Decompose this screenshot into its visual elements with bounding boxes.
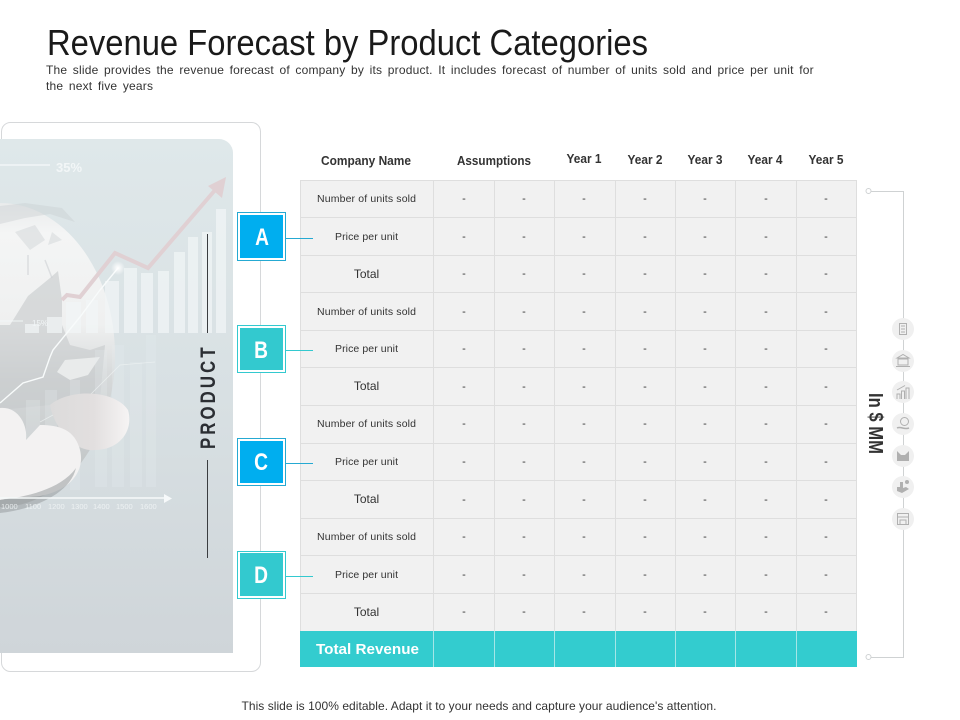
table values: - [462,456,466,468]
table values: - [764,494,768,506]
table values: - [643,343,647,355]
row labels: Number of units sold [317,418,416,430]
image: globe, hand and growth chart: 1300 [71,502,88,511]
table values: - [522,306,526,318]
table header: Year 4 [748,152,783,167]
table values: - [462,569,466,581]
icon: hand with coin [892,413,914,435]
table grid [300,180,857,631]
icon: document [892,318,914,340]
table values: - [462,606,466,618]
table values: - [824,456,828,468]
table values: - [643,494,647,506]
marker C: C [254,448,268,476]
table values: - [582,306,586,318]
table header: Year 5 [808,152,844,167]
image: globe, hand and growth chart: 1000 [1,502,18,511]
row labels: Total [354,605,379,619]
table header: Year 3 [688,152,722,167]
vertical label: PRODUCT: PRODUCT [197,347,221,449]
table values: - [703,381,707,393]
table header: Company Name [321,153,411,168]
table values: - [764,569,768,581]
table values: - [462,381,466,393]
table values: - [824,606,828,618]
unit label: In $ MM [864,393,886,454]
table values: - [582,494,586,506]
subtitle text block: The slide provides the revenue forecast of company by its product. It includes forecast of number of units sold and price per unit for [46,63,814,77]
icon column [892,318,914,530]
table values: - [522,381,526,393]
table values: - [764,231,768,243]
table values: - [522,494,526,506]
image: globe, hand and growth chart: 1200 [48,502,65,511]
table values: - [582,343,586,355]
table values: - [582,456,586,468]
image: globe, hand and growth chart: 1500 [116,502,133,511]
table values: - [703,456,707,468]
table values: - [703,531,707,543]
faint lower bars [26,335,156,490]
table values: - [824,531,828,543]
total revenue row: Total Revenue [316,641,419,658]
table values: - [462,231,466,243]
marker B: B [254,336,268,364]
table header: Year 2 [628,152,662,167]
icon: calendar [892,508,914,530]
footer text: This slide is 100% editable. Adapt it to your needs and capture your audience's attention. [242,699,716,713]
table values: - [522,418,526,430]
marker D: D [254,561,268,589]
table values: - [643,306,647,318]
table header: Year 1 [566,151,602,166]
row labels: Price per unit [335,569,398,581]
bracket: unit annotation [866,188,904,660]
table values: - [824,381,828,393]
table values: - [824,268,828,280]
table values: - [824,306,828,318]
subtitle text block [46,63,814,93]
table body background [300,180,857,631]
table values: - [764,531,768,543]
title: Revenue Forecast by Product Categories [47,22,648,63]
table values: - [643,418,647,430]
table values: - [462,418,466,430]
image: globe, hand and growth chart: 35% [56,160,82,175]
table values: - [703,193,707,205]
table header: Assumptions [457,153,531,168]
table values: - [643,268,647,280]
table values: - [764,306,768,318]
table values: - [462,343,466,355]
table values: - [703,418,707,430]
table values: - [703,569,707,581]
row labels: Price per unit [335,343,398,355]
table values: - [824,231,828,243]
row labels: Number of units sold [317,193,416,205]
connector lines from markers to table rows [286,238,313,576]
table values: - [582,193,586,205]
panel: product image card [0,122,260,672]
table values: - [824,418,828,430]
icon: team [892,445,914,467]
table values: - [522,268,526,280]
table values: - [643,381,647,393]
table values: - [703,231,707,243]
table values: - [824,569,828,581]
icon: hand with chart [892,476,914,498]
table values: - [824,343,828,355]
table values: - [824,494,828,506]
table values: - [703,494,707,506]
table values: - [462,494,466,506]
table values: - [582,569,586,581]
table values: - [764,193,768,205]
table values: - [643,531,647,543]
table values: - [582,606,586,618]
image: globe, hand and growth chart: 1600 [140,502,157,511]
image: globe, hand and growth chart [0,139,233,653]
table values: - [643,456,647,468]
row labels: Price per unit [335,456,398,468]
table values: - [643,231,647,243]
hand [50,394,129,450]
image: globe, hand and growth chart: 1400 [93,502,110,511]
marker C [238,438,286,486]
table values: - [462,193,466,205]
table: revenue forecast [300,151,857,667]
table values: - [522,531,526,543]
icon: bank [892,350,914,372]
table header [321,151,844,168]
marker A: A [255,223,269,251]
marker B [238,326,286,372]
marker D [238,552,286,598]
table values: - [582,268,586,280]
table values: - [462,306,466,318]
table values: - [764,606,768,618]
table values: - [522,606,526,618]
table values: - [522,456,526,468]
image: globe, hand and growth chart: 15% [32,319,48,328]
row labels: Price per unit [335,231,398,243]
table values: - [703,606,707,618]
row labels: Total [354,379,379,393]
table values: - [522,343,526,355]
table values: - [643,569,647,581]
table values: - [764,343,768,355]
icon: growth bars [892,381,914,403]
row labels: Number of units sold [317,306,416,318]
table values: - [462,268,466,280]
table values: - [824,193,828,205]
table values [462,193,828,618]
table values: - [703,306,707,318]
image: globe, hand and growth chart: 1100 [25,502,41,511]
subtitle text block: the next five years [46,79,153,93]
table values: - [703,268,707,280]
table values: - [764,456,768,468]
table values: - [643,193,647,205]
row labels [317,193,416,619]
table values: - [582,381,586,393]
table values: - [522,569,526,581]
table values: - [764,268,768,280]
table values: - [462,531,466,543]
table values: - [643,606,647,618]
table values: - [582,418,586,430]
table values: - [764,418,768,430]
table values: - [522,193,526,205]
row labels: Total [354,492,379,506]
table values: - [703,343,707,355]
marker A [238,212,286,260]
table values: - [582,231,586,243]
total revenue row [300,631,857,667]
table values: - [582,531,586,543]
row labels: Number of units sold [317,531,416,543]
table values: - [522,231,526,243]
row labels: Total [354,267,379,281]
table values: - [764,381,768,393]
